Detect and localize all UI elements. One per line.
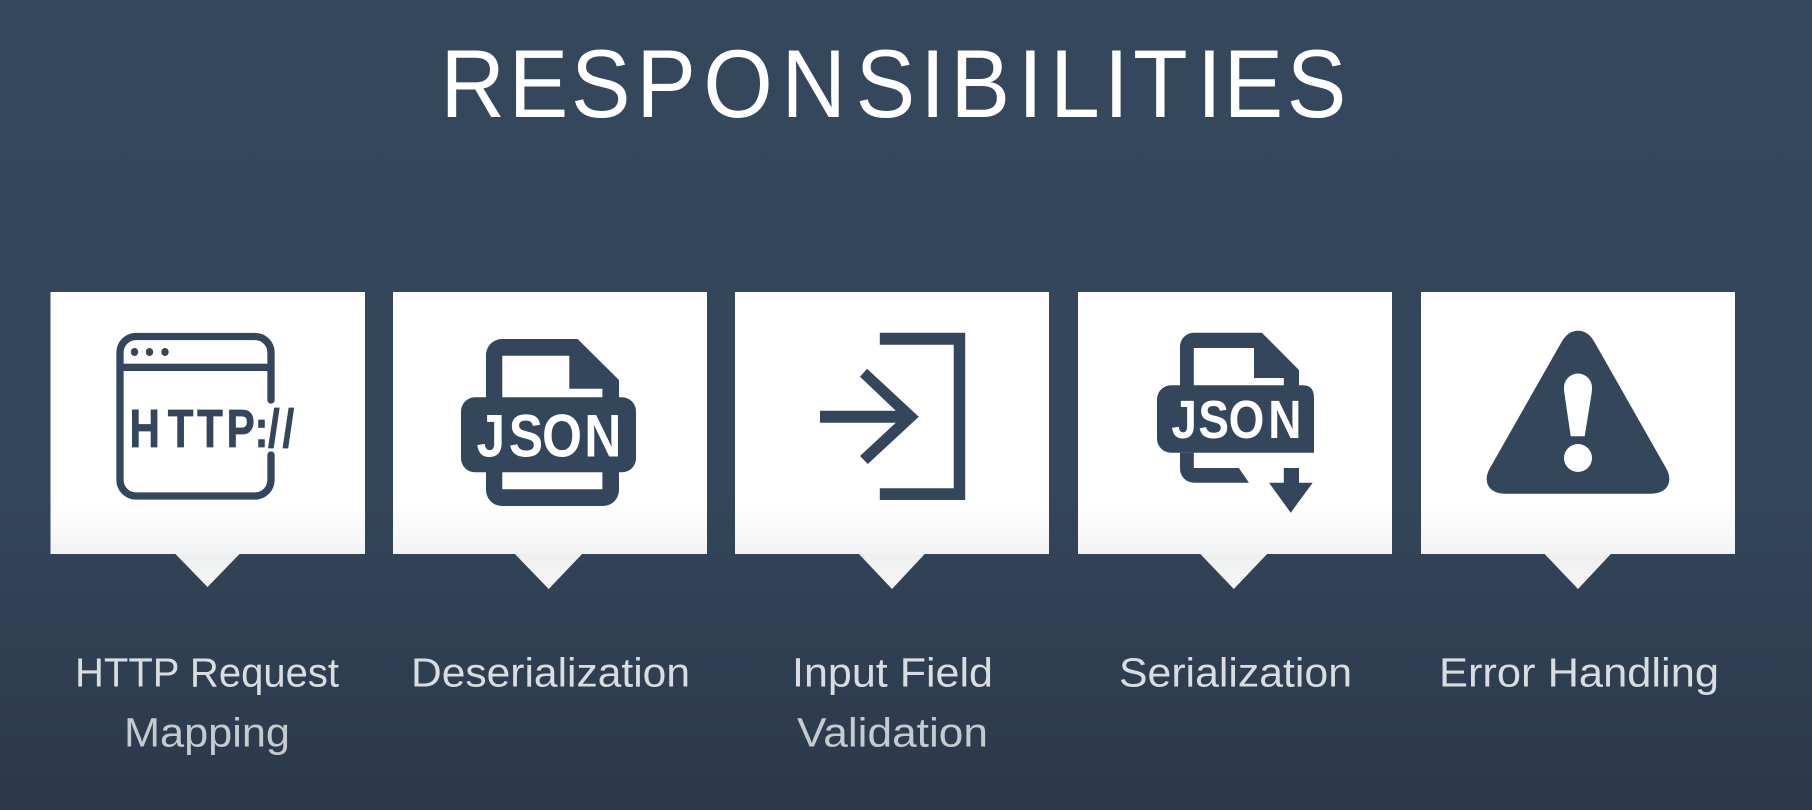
label: Input Field Validation	[792, 650, 993, 756]
card	[393, 292, 707, 554]
card	[735, 292, 1049, 554]
icon: browser window with HTTP: HTTP://	[129, 399, 294, 459]
card	[1078, 292, 1392, 554]
panel: error handling	[1421, 292, 1735, 696]
icon: arrow into bracket	[820, 333, 965, 500]
panel: input field validation	[735, 292, 1049, 756]
icon: JSON file	[461, 339, 636, 506]
card pointer	[1198, 552, 1269, 589]
panel: deserialization	[393, 292, 707, 696]
label: Serialization: Serialization	[1119, 650, 1352, 696]
card pointer	[513, 552, 584, 589]
label: HTTP Request Mapping: Mapping	[124, 710, 290, 756]
label: HTTP Request Mapping: HTTP Request	[75, 650, 340, 696]
icon: JSON file download	[1157, 333, 1314, 513]
label: Error Handling: Error Handling	[1439, 650, 1719, 696]
icon: warning triangle	[1487, 331, 1669, 494]
card pointer	[857, 552, 927, 589]
card pointer	[174, 552, 242, 587]
label: Input Field Validation: Input Field	[792, 650, 993, 696]
icon: browser window with HTTP	[120, 336, 294, 496]
label: Input Field Validation: Validation	[797, 710, 988, 756]
icon: JSON file download: JSON	[1171, 390, 1301, 450]
title: RESPONSIBILITIES	[440, 30, 1346, 138]
card pointer	[1543, 552, 1613, 589]
panel: serialization	[1078, 292, 1392, 696]
card	[50, 292, 365, 554]
panel: HTTP request mapping	[50, 292, 365, 756]
label: Deserialization: Deserialization	[411, 650, 690, 696]
card	[1421, 292, 1735, 554]
icon: JSON file: JSON	[477, 402, 621, 469]
label: HTTP Request Mapping	[75, 650, 340, 756]
